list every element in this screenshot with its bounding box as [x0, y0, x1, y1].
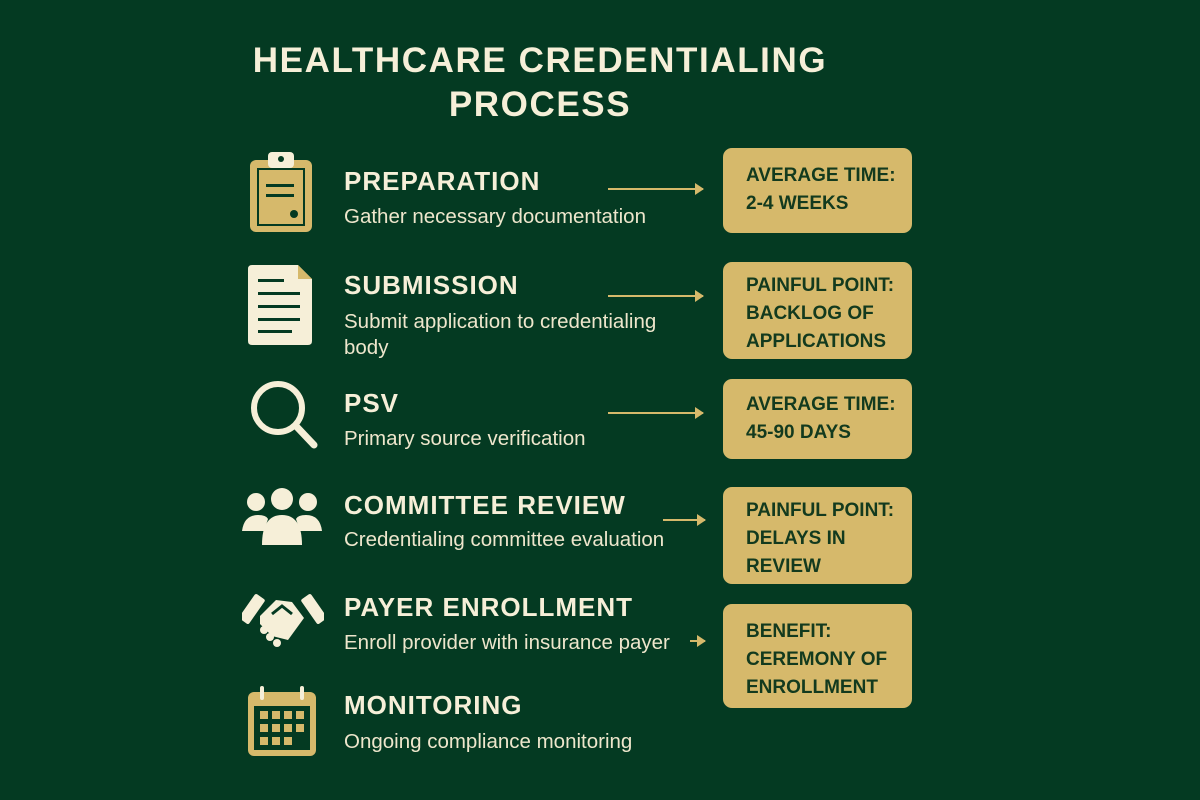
arrow 4 [663, 519, 705, 521]
heading: preparation: PREPARATION [344, 166, 540, 196]
heading: committee review: COMMITTEE REVIEW [344, 490, 626, 520]
title: HEALTHCARE CREDENTIALING [253, 41, 827, 80]
text: submission: body [344, 336, 388, 359]
icon: calendar [248, 686, 316, 756]
box: average time 1 [723, 148, 912, 233]
box: painful point delays [723, 487, 912, 584]
box: benefit [723, 604, 912, 708]
box: average time 1: 2-4 WEEKS [746, 193, 848, 214]
box: painful point delays: PAINFUL POINT: [746, 500, 894, 521]
heading: payer enrollment: PAYER ENROLLMENT [344, 592, 633, 622]
arrow 1 [608, 188, 703, 190]
text: PSV: Primary source verification [344, 427, 586, 450]
icon: handshake [242, 594, 324, 647]
text: submission [344, 310, 656, 359]
text: committee review: Credentialing committee evaluation [344, 528, 664, 551]
title [253, 41, 827, 124]
arrow 5 [690, 640, 705, 642]
box: painful point backlog: PAINFUL POINT: [746, 275, 894, 296]
text: monitoring: Ongoing compliance monitoring [344, 730, 632, 753]
text: payer enrollment: Enroll provider with insurance payer [344, 631, 670, 654]
box: benefit: CEREMONY OF [746, 649, 887, 670]
icon: magnifier [251, 381, 318, 448]
text: preparation: Gather necessary documentation [344, 205, 646, 228]
box: average time 2: 45-90 DAYS [746, 422, 851, 443]
heading: submission: SUBMISSION [344, 270, 519, 300]
heading: monitoring: MONITORING [344, 690, 523, 720]
box: painful point delays: REVIEW [746, 556, 821, 577]
box: painful point backlog: BACKLOG OF [746, 303, 874, 324]
box: painful point delays: DELAYS IN [746, 528, 846, 549]
box: painful point backlog [723, 262, 912, 359]
text: submission: Submit application to credentialing [344, 310, 656, 333]
box: benefit: ENROLLMENT [746, 677, 878, 698]
arrow 2 [608, 295, 703, 297]
box: painful point backlog: APPLICATIONS [746, 331, 886, 352]
heading: PSV: PSV [344, 388, 399, 418]
icon: group [242, 488, 322, 545]
icon: clipboard [250, 152, 312, 232]
box: average time 2: AVERAGE TIME: [746, 394, 896, 415]
box: average time 2 [723, 379, 912, 459]
arrow 3 [608, 412, 703, 414]
icon: document [248, 265, 312, 345]
title: PROCESS [449, 85, 631, 124]
box: benefit: BENEFIT: [746, 621, 832, 642]
box: average time 1: AVERAGE TIME: [746, 165, 896, 186]
